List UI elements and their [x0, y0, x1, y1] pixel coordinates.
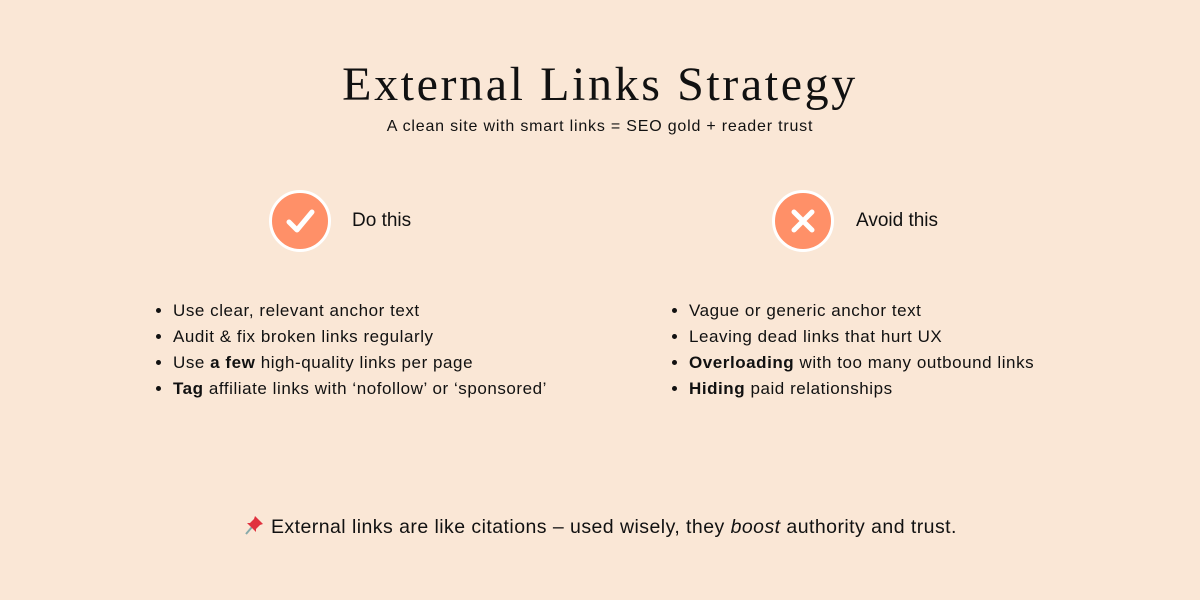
title: External Links Strategy — [342, 58, 858, 111]
list: avoid: Overloading with too many outbound links — [689, 353, 1034, 372]
footer note: External links are like citations – used wisely, they boost authority and trust. — [271, 516, 957, 538]
heading: avoid this: Avoid this — [856, 210, 938, 231]
list: do: Audit & fix broken links regularly — [173, 327, 434, 346]
list: do: Use a few high-quality links per page — [173, 353, 473, 372]
list: do: Tag affiliate links with ‘nofollow’ or ‘sponsored’ — [173, 379, 547, 398]
list: do: Use clear, relevant anchor text — [173, 301, 420, 320]
list: avoid: Leaving dead links that hurt UX — [689, 327, 942, 346]
icon: cross — [772, 190, 834, 252]
list: avoid: Hiding paid relationships — [689, 379, 893, 398]
icon: check — [269, 190, 331, 252]
list: do — [156, 301, 547, 398]
subtitle: A clean site with smart links = SEO gold + reader trust — [387, 118, 813, 135]
heading: do this: Do this — [352, 210, 411, 231]
list: avoid: Vague or generic anchor text — [689, 301, 921, 320]
list: avoid — [672, 301, 1034, 398]
